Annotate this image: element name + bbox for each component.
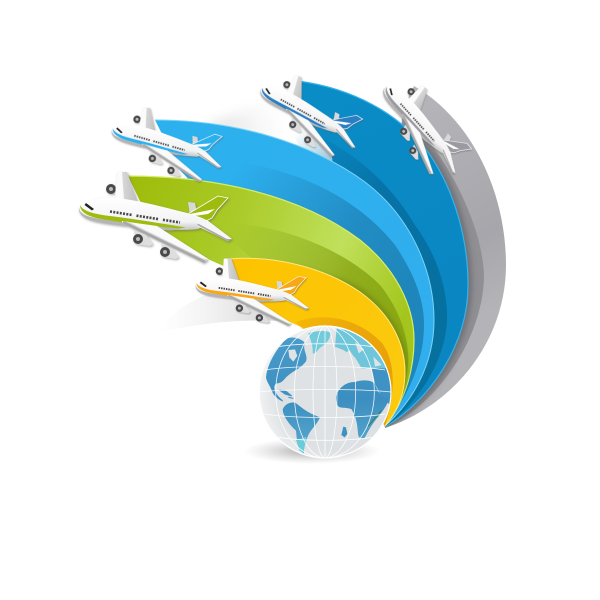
infographic: ribbons, globe and planes — [78, 75, 506, 462]
ribbon: light blue — [155, 120, 434, 426]
plane: green — [78, 172, 232, 263]
continent: Asia and Indian ocean side — [372, 368, 390, 404]
globe — [258, 326, 395, 458]
continent: South America — [283, 402, 320, 453]
ribbon: yellow — [228, 258, 405, 426]
green coast accent — [368, 410, 382, 426]
Caribbean islands — [279, 390, 293, 398]
green inner band — [210, 222, 408, 426]
plane: dark blue — [247, 65, 372, 163]
dark blue inner band — [290, 125, 447, 427]
plane: light blue — [106, 104, 227, 185]
ribbon: dark blue — [290, 81, 468, 427]
continent: Africa — [336, 380, 389, 439]
plane: grey — [360, 68, 486, 187]
orange inner band — [296, 317, 393, 426]
soft shadow: under yellow ribbon — [160, 280, 300, 332]
grid — [259, 326, 391, 458]
continent: North America — [266, 338, 307, 402]
Hudson Bay — [288, 349, 297, 362]
continent: Greenland — [308, 331, 331, 353]
Europe land patches — [346, 342, 382, 368]
ribbon: green — [128, 176, 414, 426]
light blue inner band — [215, 160, 424, 426]
grey inner band — [385, 130, 484, 428]
globe shadow — [244, 438, 380, 464]
Madagascar — [341, 427, 347, 437]
plane: orange — [195, 259, 309, 326]
soft shadow: behind upper ribbons — [205, 95, 340, 160]
ribbon: grey — [385, 86, 506, 428]
continent: Eurasia north — [335, 328, 386, 368]
